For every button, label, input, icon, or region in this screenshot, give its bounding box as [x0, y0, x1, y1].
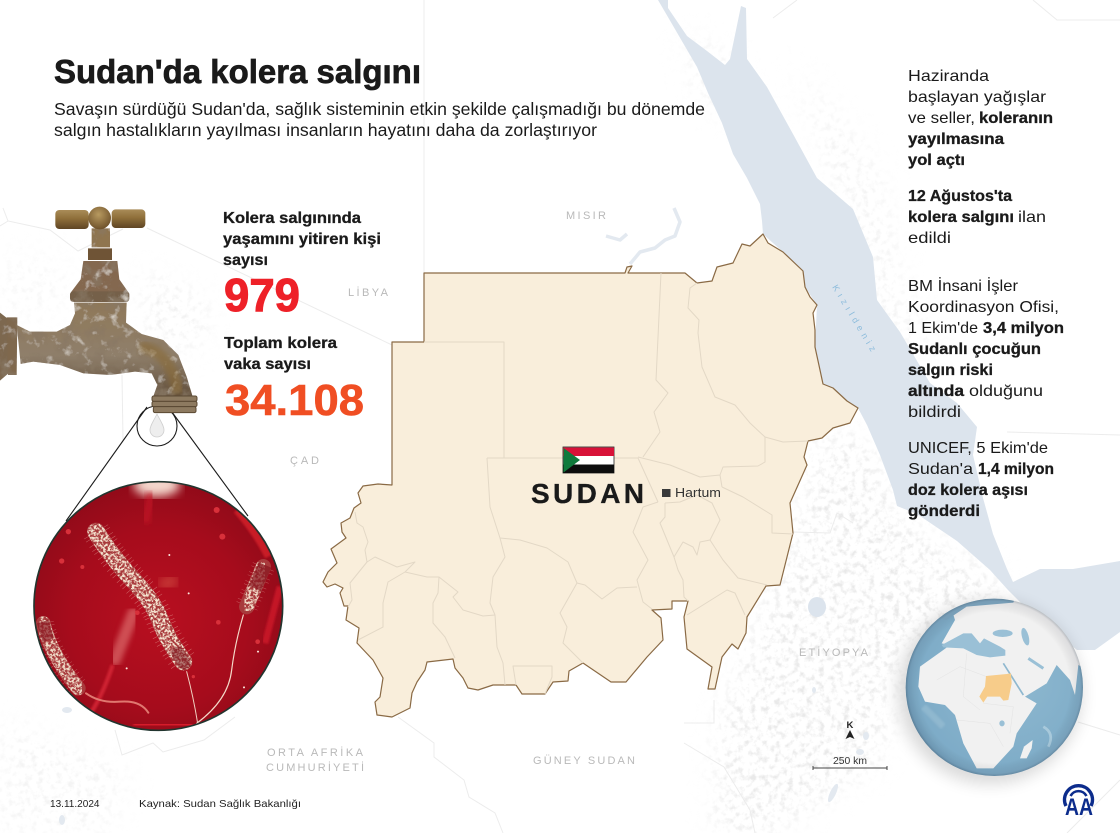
statistic: deaths: Kolera salgınında [223, 210, 361, 227]
map labels: ORTA AFRİKA [267, 746, 364, 759]
scale bar: 250 km [833, 755, 867, 767]
bacterium left [43, 622, 148, 713]
map labels: LİBYA [348, 286, 389, 299]
text block: rains [908, 68, 1053, 169]
statistic: cases [224, 335, 364, 425]
map labels: CUMHURİYETİ [266, 761, 364, 774]
statistic: cases: Toplam kolera [224, 335, 337, 352]
text block: un warning: Sudanlı çocuğun [908, 341, 1041, 358]
text block: un warning: Koordinasyon Ofisi, [908, 299, 1059, 316]
sudan on globe [979, 673, 1012, 703]
red sea and gulf of aden [658, 0, 1120, 650]
map labels: GÜNEY SUDAN [533, 755, 635, 767]
text block: declaration: kolera salgını [908, 209, 1014, 226]
text block: rains: yol açtı [908, 152, 965, 169]
bacterium right [197, 565, 265, 723]
circle outline [34, 482, 283, 730]
globe locator [906, 598, 1083, 776]
sudan map [323, 234, 858, 717]
lake nasser [606, 208, 680, 264]
north arrow [846, 720, 854, 739]
text block: unicef: Sudan'a [908, 461, 973, 478]
text block: declaration: 12 Ağustos'ta [908, 188, 1012, 205]
text block: un warning: 1 Ekim'de [908, 320, 978, 337]
faucet wall flange [0, 313, 17, 381]
faucet handle [55, 207, 145, 229]
background glows [128, 482, 185, 499]
title: Sudan'da kolera salgını [54, 53, 421, 90]
text block: unicef: gönderdi [908, 503, 980, 520]
statistic: deaths [223, 210, 381, 321]
text block: rains: yayılmasına [908, 131, 1004, 148]
text block: rains: başlayan yağışlar [908, 89, 1047, 106]
mediterranean [942, 633, 1005, 657]
map labels: ETİYOPYA [799, 646, 869, 659]
statistic: cases: 34.108 [225, 376, 364, 425]
faucet bonnet [71, 261, 129, 293]
map labels [266, 210, 878, 774]
bacterium large [96, 532, 198, 723]
text block: un warning: bildirdi [908, 404, 961, 421]
sudan silhouette [323, 234, 858, 717]
text block: declaration: edildi [908, 230, 951, 247]
icon: anadolu agency logo: AA [1065, 794, 1093, 821]
subtitle [54, 99, 705, 140]
text block: un warning: 3,4 milyon [983, 320, 1064, 337]
text block: unicef: doz kolera aşısı [908, 482, 1028, 499]
faucet nut [70, 291, 129, 302]
capital marker: Hartum [675, 485, 721, 500]
icon: faucet [0, 207, 197, 413]
text block: unicef: 1,4 milyon [978, 461, 1054, 478]
text block: rains: Haziranda [908, 68, 989, 85]
icon: sudan flag [563, 447, 614, 473]
text block: rains: koleranın [979, 110, 1053, 127]
map labels: ÇAD [290, 455, 319, 467]
text block: declaration: ilan [1018, 209, 1046, 226]
globe oceans [906, 610, 1083, 776]
text block: un warning: olduğunu [969, 383, 1043, 400]
text block: un warning: BM İnsani İşler [908, 276, 1019, 295]
globe rim shading [906, 599, 1083, 776]
bacteria circle [33, 473, 283, 730]
text block: un warning [908, 276, 1064, 421]
small lakes [59, 687, 869, 825]
subtitle: salgın hastalıkların yayılması insanların hayatını daha da zorlaştırıyor [54, 120, 597, 140]
globe shadow [898, 600, 1082, 784]
text block: rains: ve seller, [908, 110, 975, 127]
statistic: deaths: 979 [224, 269, 300, 321]
map labels: MISIR [566, 210, 606, 222]
north arrow: K [846, 720, 854, 731]
spout threads [152, 396, 197, 413]
text block: unicef [908, 440, 1054, 520]
floating particles [59, 507, 260, 678]
map labels: Kızıldeniz [830, 283, 878, 354]
text block: un warning: salgın riski [908, 362, 993, 379]
icon: anadolu agency logo [1064, 786, 1093, 821]
statistic: cases: vaka sayısı [224, 356, 311, 373]
subtitle: Savaşın sürdüğü Sudan'da, sağlık sisteminin etkin şekilde çalışmadığı bu dönemde [54, 99, 705, 119]
lake tana [808, 597, 826, 617]
shelf highlights [1043, 727, 1051, 747]
faucet body [17, 303, 193, 398]
text block: declaration [908, 188, 1046, 247]
spout bronze patina [140, 347, 178, 393]
statistic: deaths: sayısı [223, 252, 268, 269]
statistic: deaths: yaşamını yitiren kişi [223, 231, 381, 248]
circle background [34, 482, 282, 730]
text block: un warning: altında [908, 383, 964, 400]
text block: unicef: UNICEF, 5 Ekim'de [908, 440, 1048, 457]
state borders [348, 273, 808, 694]
source: Kaynak: Sudan Sağlık Bakanlığı [139, 798, 301, 810]
date: 13.11.2024 [50, 798, 100, 810]
faucet collar and stem [88, 248, 112, 260]
country lines [937, 653, 1013, 747]
scale bar [813, 755, 887, 770]
icon: water drop [150, 414, 164, 437]
magnifier connector [66, 406, 248, 521]
country label: SUDAN [531, 478, 644, 509]
